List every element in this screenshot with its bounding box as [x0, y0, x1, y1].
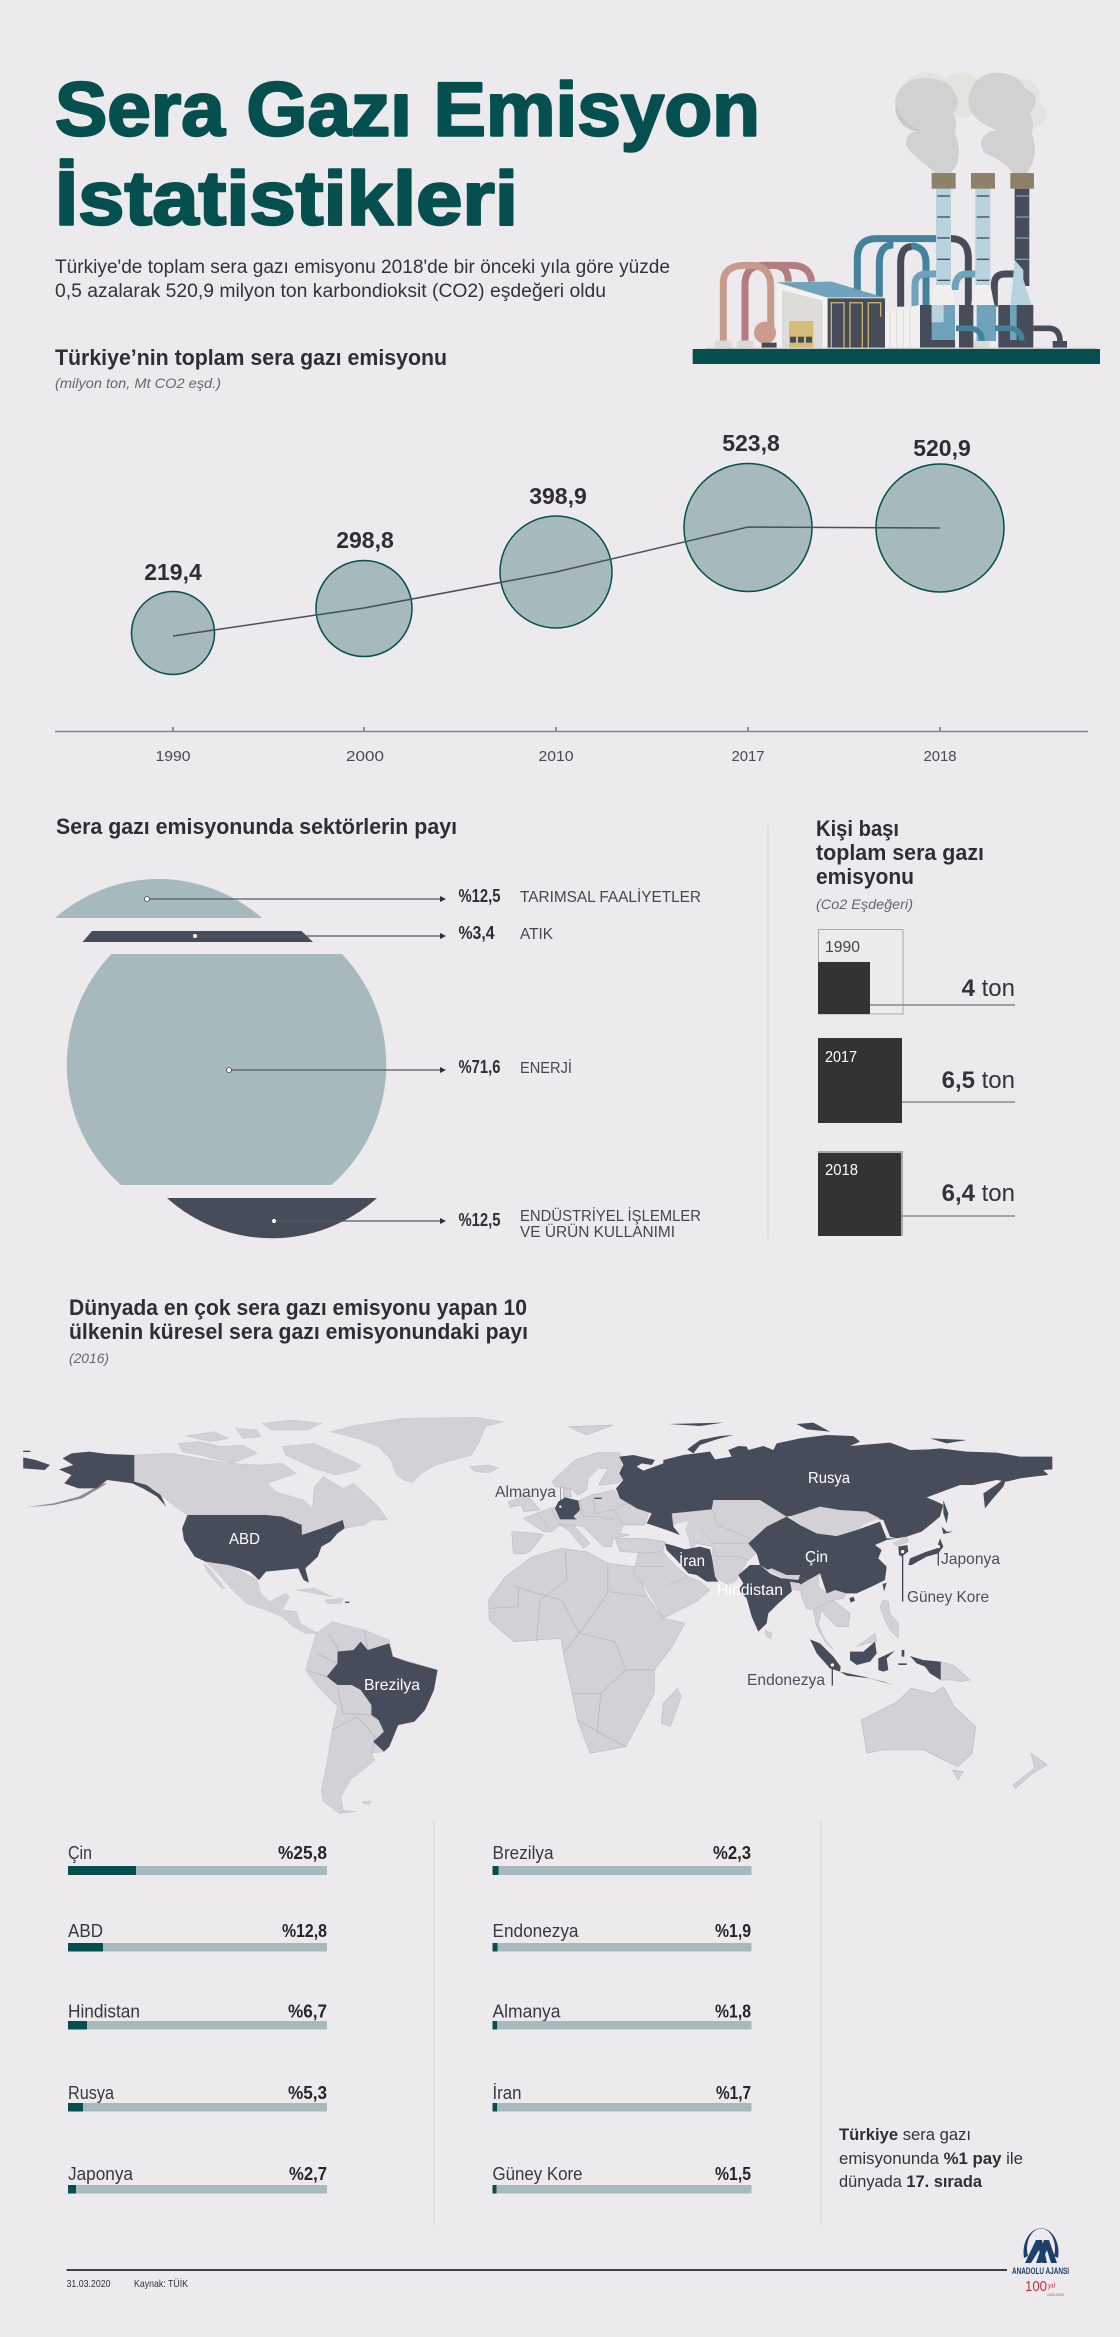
footer: date and source: Kaynak: TÜİK [134, 2277, 188, 2290]
map labels: ABD [229, 1531, 260, 1548]
callout: Turkey rank: Türkiye sera gazı [839, 2125, 971, 2144]
heading: sector share: Sera gazı emisyonunda sektörlerin payı [56, 814, 457, 839]
subtitle: CO2 equivalent: (Co2 Eşdeğeri) [816, 896, 913, 912]
sector label: waste: ATIK [520, 926, 553, 943]
map labels: Çin [805, 1549, 828, 1566]
bubble line chart: 398,9 [529, 483, 587, 509]
callout: Turkey rank [839, 2125, 1023, 2191]
heading: per capita: emisyonu [816, 864, 914, 889]
logo: Anadolu Ajansı: ANADOLU AJANSI [1012, 2266, 1069, 2277]
bubble line chart: 2000 [346, 748, 384, 765]
title [55, 68, 760, 242]
country bars: left column [68, 1843, 327, 2194]
bubble line chart: 298,8 [336, 527, 394, 553]
heading: total emissions: Türkiye’nin toplam sera gazı emisyonu [55, 345, 447, 370]
heading: per capita: toplam sera gazı [816, 840, 984, 865]
per capita 1990: 4 ton [962, 975, 1015, 1002]
sector label: energy: %71,6 [458, 1057, 500, 1077]
sector label: waste [458, 923, 553, 943]
logo: Anadolu Ajansı: yıl [1047, 2283, 1055, 2290]
bubble line chart: 1990 [156, 748, 190, 765]
world map [23, 1417, 1052, 1813]
bar: South Korea: Güney Kore [492, 2164, 582, 2184]
sector label: industry: VE ÜRÜN KULLANIMI [520, 1223, 675, 1241]
title: İstatistikleri [55, 156, 518, 242]
per capita 2017: 6,5 ton [942, 1067, 1015, 1094]
footer: date and source: 31.03.2020 [66, 2278, 111, 2290]
per capita 1990 [818, 930, 1015, 1014]
intro paragraph: 0,5 azalarak 520,9 milyon ton karbondioksit (CO2) eşdeğeri oldu [55, 281, 606, 302]
bar: Russia: Rusya [68, 2083, 115, 2103]
bubble line chart: 2018 [924, 748, 956, 765]
bar: Germany: Almanya [492, 2002, 561, 2022]
per capita 2018: 2018 [825, 1162, 858, 1179]
map: Africa and Oceania [489, 1548, 1047, 1788]
intro paragraph: Türkiye'de toplam sera gazı emisyonu 2018'de bir önceki yıla göre yüzde [55, 257, 670, 278]
footer rule [66, 2269, 1007, 2271]
bubble line chart: 520,9 [913, 435, 971, 461]
sector chart [55, 879, 701, 1241]
bubble line chart: 523,8 [722, 430, 780, 456]
map: Asia [615, 1423, 1052, 1686]
sector label: agriculture: TARIMSAL FAALİYETLER [520, 887, 701, 906]
icon: factory illustration [693, 72, 1100, 364]
heading: world map [69, 1295, 528, 1344]
bubble line chart: 2017 [732, 748, 764, 765]
per capita 1990: 1990 [825, 939, 860, 956]
map labels: Rusya [808, 1470, 850, 1487]
per capita 2017: 2017 [825, 1049, 857, 1066]
bar: Germany [492, 2002, 752, 2030]
heading: per capita [816, 816, 984, 889]
bar: Brazil: %2,3 [713, 1843, 751, 1863]
bar: Japan: Japonya [68, 2164, 134, 2184]
bar: China: %25,8 [278, 1843, 327, 1863]
bar: Indonesia [492, 1921, 752, 1952]
heading: per capita: Kişi başı [816, 816, 899, 841]
bar: Indonesia: %1,9 [715, 1921, 751, 1941]
country bars: right column [492, 1843, 752, 2194]
map labels: Japonya [941, 1551, 1000, 1568]
map: Americas [23, 1417, 504, 1813]
sector label: waste: %3,4 [458, 923, 494, 943]
bar: India [68, 2002, 327, 2030]
bar: South Korea: %1,5 [715, 2164, 751, 2184]
sector label: industry: %12,5 [458, 1210, 500, 1230]
map labels: Brezilya [364, 1677, 420, 1694]
bar: Brazil: Brezilya [492, 1843, 554, 1863]
map labels: Almanya [495, 1484, 556, 1501]
bar: Germany: %1,8 [715, 2002, 751, 2022]
sector label: energy [458, 1057, 572, 1077]
sector label: agriculture: %12,5 [458, 886, 500, 906]
bar: South Korea [492, 2164, 752, 2194]
subtitle: year: (2016) [69, 1350, 109, 1366]
bar: Russia [68, 2083, 327, 2112]
sector label: agriculture [458, 886, 701, 906]
sector label: industry: ENDÜSTRİYEL İŞLEMLER [520, 1206, 701, 1225]
bar: Iran [492, 2083, 752, 2112]
smoke stacks [932, 173, 1034, 305]
subtitle: unit: (milyon ton, Mt CO2 eşd.) [55, 375, 221, 391]
bar: Indonesia: Endonezya [492, 1921, 579, 1941]
bar: USA: %12,8 [282, 1921, 327, 1941]
heading: world map: Dünyada en çok sera gazı emisyonu yapan 10 [69, 1295, 527, 1320]
per capita 2017 [818, 1038, 1015, 1123]
map labels: Hindistan [717, 1582, 783, 1599]
bar: Japan: %2,7 [289, 2164, 327, 2184]
heading: world map: ülkenin küresel sera gazı emisyonundaki payı [69, 1319, 528, 1344]
bar: Iran: %1,7 [716, 2083, 751, 2103]
callout: Turkey rank: emisyonunda %1 pay ile [839, 2149, 1023, 2168]
map: Europe [508, 1425, 650, 1554]
bar: Brazil [492, 1843, 752, 1875]
map labels: Endonezya [747, 1672, 825, 1689]
logo: Anadolu Ajansı: 100 [1025, 2278, 1047, 2295]
logo: Anadolu Ajansı [1012, 2228, 1069, 2297]
bar: Russia: %5,3 [288, 2083, 327, 2103]
per capita 2018 [818, 1151, 1015, 1236]
map labels: Güney Kore [907, 1589, 989, 1606]
bar: USA [68, 1921, 327, 1952]
bar: India: Hindistan [68, 2002, 140, 2022]
bar: Iran: İran [492, 2083, 522, 2103]
map labels: İran [679, 1551, 705, 1570]
bar: Japan [68, 2164, 327, 2194]
bar: USA: ABD [68, 1921, 103, 1941]
callout: Turkey rank: dünyada 17. sırada [839, 2172, 983, 2191]
intro paragraph [55, 257, 670, 302]
footer: date and source [66, 2277, 188, 2290]
per capita 2018: 6,4 ton [942, 1180, 1015, 1207]
bar: India: %6,7 [288, 2002, 327, 2022]
title: Sera Gazı Emisyon [55, 68, 760, 152]
bar: China: Çin [68, 1843, 92, 1863]
sector label: industry [458, 1206, 701, 1241]
bubble line chart: 2010 [538, 748, 574, 765]
logo: Anadolu Ajansı: 1920-2020 [1047, 2293, 1064, 2297]
bubble line chart: 219,4 [144, 559, 202, 585]
bar: China [68, 1843, 327, 1875]
bubble line chart [55, 430, 1088, 765]
map labels [229, 1470, 1000, 1694]
sector label: energy: ENERJİ [520, 1058, 572, 1077]
